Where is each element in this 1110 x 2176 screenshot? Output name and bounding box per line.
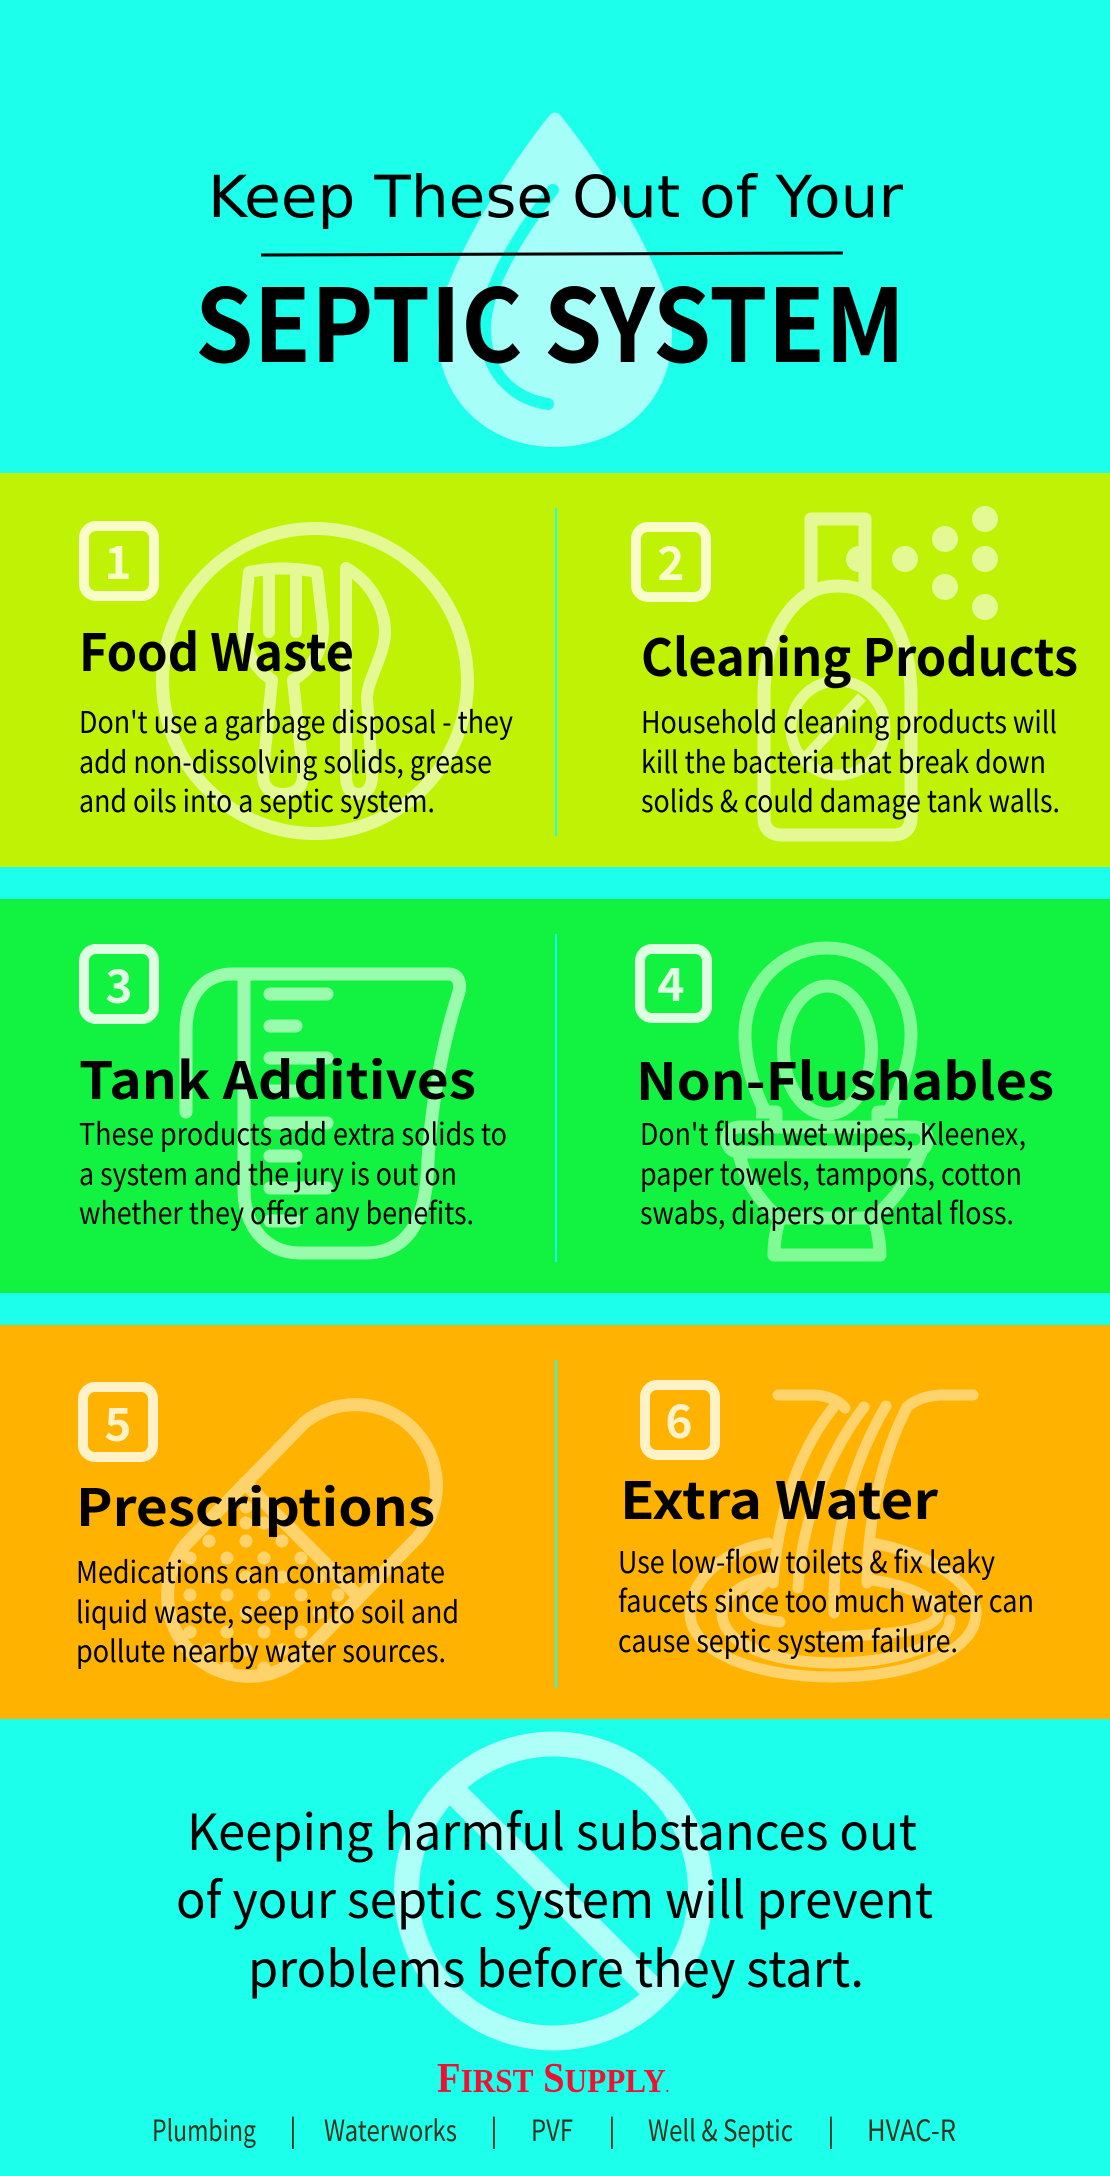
- heading: Extra Water: [620, 1460, 939, 1534]
- body text: [640, 1110, 1026, 1233]
- body text: faucets since too much water can: [618, 1577, 1034, 1621]
- icon: spray bottle: [764, 506, 998, 835]
- body text: a system and the jury is out on: [79, 1150, 457, 1194]
- number badge 4: [640, 949, 707, 1018]
- body text: [76, 1548, 459, 1671]
- body text: These products add extra solids to: [79, 1110, 507, 1154]
- body text: kill the bacteria that break down: [641, 738, 1046, 782]
- card 3: tank additives: [79, 949, 507, 1253]
- icon: water pouring into pool: [690, 1395, 976, 1677]
- icon: toilet: [727, 948, 927, 1255]
- heading: Cleaning Products: [641, 617, 1078, 691]
- body text: Don't use a garbage disposal - they: [79, 698, 513, 742]
- number badge 3: [84, 949, 154, 1019]
- number badge 4: 4: [657, 949, 685, 1015]
- heading: Tank Additives: [79, 1040, 476, 1114]
- footer: service list: PVF: [531, 2108, 573, 2150]
- heading: Prescriptions: [76, 1467, 435, 1541]
- body text: and oils into a septic system.: [79, 777, 435, 821]
- icon: measuring beaker: [186, 974, 460, 1253]
- body text: [618, 1538, 1034, 1661]
- card 6: extra water: [618, 1385, 1034, 1677]
- number badge 2: [636, 527, 706, 597]
- icon: capsule: [168, 1405, 436, 1676]
- panel: lime row: [0, 473, 1110, 867]
- body text: paper towels, tampons, cotton: [640, 1150, 1022, 1194]
- footer: service list: Waterworks: [324, 2108, 457, 2150]
- body text: solids & could damage tank walls.: [641, 777, 1060, 821]
- card 1: food waste: [79, 526, 513, 834]
- panel: header: [195, 112, 905, 447]
- icon: prohibition sign: [406, 1744, 700, 2038]
- body text: liquid waste, seep into soil and: [76, 1588, 459, 1632]
- body text: [79, 698, 513, 821]
- body text: Don't flush wet wipes, Kleenex,: [640, 1110, 1026, 1154]
- logo: First Supply: FIRST SUPPLY.: [437, 2056, 669, 2102]
- body text: Use low-flow toilets & fix leaky: [618, 1538, 995, 1582]
- body text: [641, 698, 1060, 821]
- divider: [555, 1360, 557, 1688]
- closing text: problems before they start.: [248, 1930, 864, 2002]
- body text: whether they offer any benefits.: [79, 1189, 474, 1233]
- title rule: [261, 253, 843, 255]
- number badge 1: 1: [104, 527, 132, 593]
- icon: plate with fork and knife: [162, 528, 468, 834]
- body text: Medications can contaminate: [76, 1548, 445, 1592]
- body text: cause septic system failure.: [618, 1617, 958, 1661]
- body text: Household cleaning products will: [641, 698, 1057, 742]
- footer: service list: Well & Septic: [648, 2108, 793, 2150]
- number badge 6: [645, 1385, 715, 1455]
- body text: swabs, diapers or dental floss.: [640, 1189, 1014, 1233]
- heading: Non-Flushables: [636, 1041, 1054, 1115]
- body text: pollute nearby water sources.: [76, 1627, 446, 1671]
- panel: green row: [0, 899, 1110, 1293]
- closing text: [176, 1793, 933, 2002]
- body text: [79, 1110, 507, 1233]
- number badge 5: [83, 1387, 153, 1457]
- panel: closing message: [176, 1744, 933, 2038]
- closing text: of your septic system will prevent: [176, 1861, 933, 1933]
- card 5: prescriptions: [76, 1387, 459, 1676]
- footer: service list: HVAC-R: [867, 2108, 956, 2150]
- footer: service list: Plumbing: [152, 2108, 256, 2150]
- divider: [555, 934, 557, 1262]
- number badge 3: 3: [105, 951, 133, 1017]
- footer: service list: |: [608, 2108, 616, 2150]
- body text: add non-dissolving solids, grease: [79, 738, 492, 782]
- card 2: cleaning products: [636, 506, 1078, 835]
- closing text: Keeping harmful substances out: [187, 1793, 917, 1865]
- card 4: non-flushables: [636, 948, 1054, 1255]
- divider: [555, 508, 557, 836]
- title line 2: SEPTIC SYSTEM: [195, 246, 905, 392]
- panel: orange row: [0, 1325, 1110, 1719]
- footer: service list: |: [289, 2108, 297, 2150]
- footer: service list: [152, 2108, 956, 2150]
- heading: Food Waste: [79, 612, 354, 686]
- icon: water drop: [438, 112, 672, 447]
- title line 1: Keep These Out of Your: [208, 163, 903, 231]
- number badge 5: 5: [104, 1389, 132, 1455]
- footer: service list: |: [827, 2108, 835, 2150]
- footer: service list: |: [490, 2108, 498, 2150]
- number badge 1: [84, 526, 154, 596]
- number badge 2: 2: [657, 528, 685, 594]
- number badge 6: 6: [665, 1386, 693, 1452]
